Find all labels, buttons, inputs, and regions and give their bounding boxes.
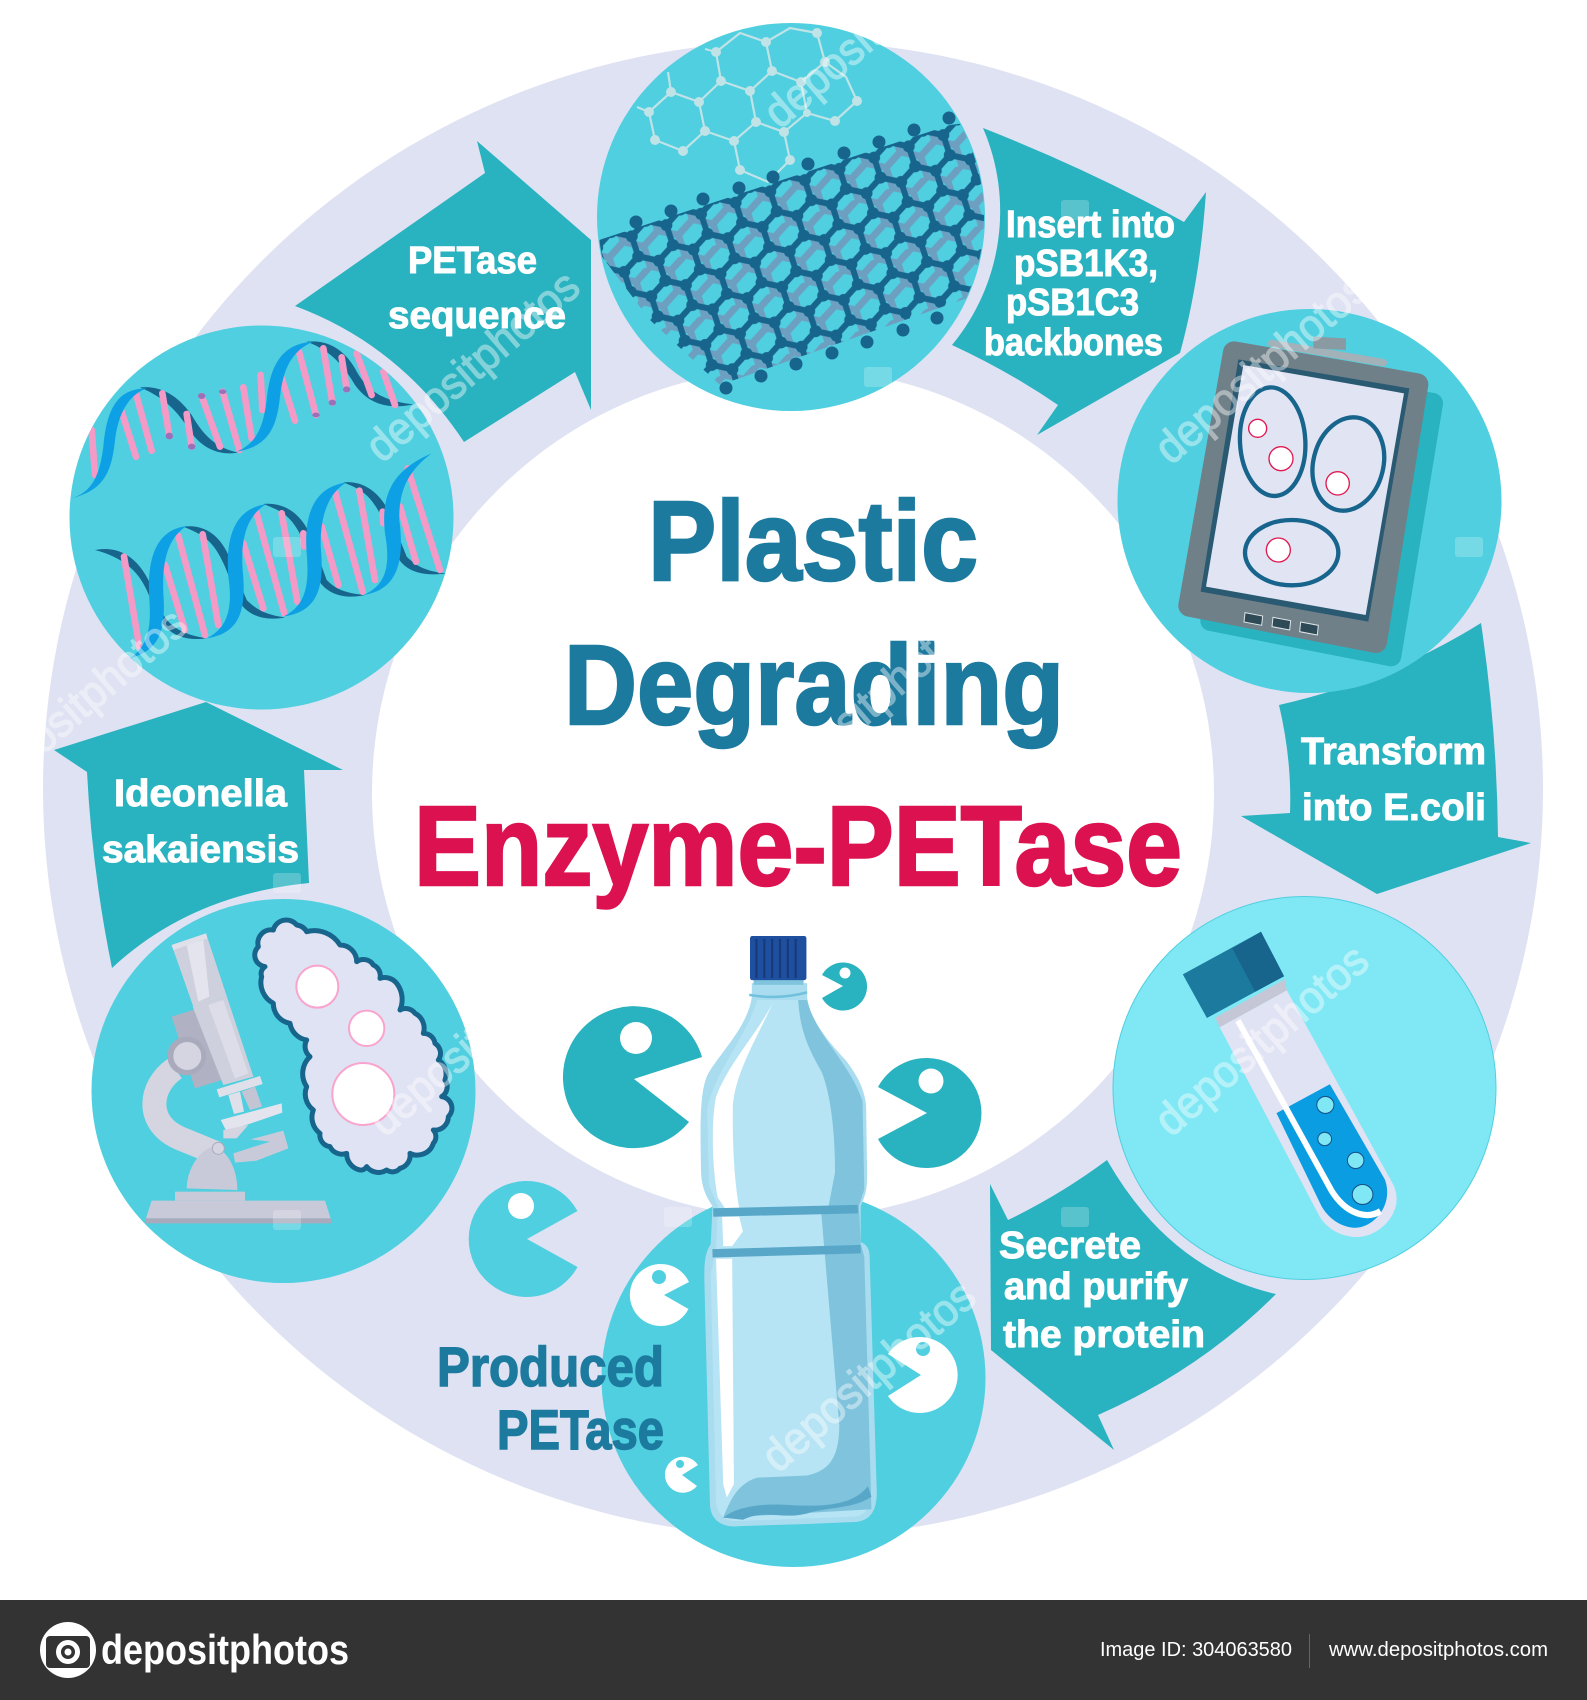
tube glass (1220, 990, 1397, 1237)
website: www.depositphotos.com (1328, 1639, 1548, 1661)
icon: camera logo (40, 1622, 96, 1678)
tablet buttons (1244, 613, 1318, 635)
arrow: insert into backbones: Insert into (1006, 204, 1175, 246)
title (414, 478, 1182, 909)
tube cap (1183, 932, 1284, 1018)
panel: DNA helices (70, 326, 454, 710)
white pac-man enzymes on circle (630, 1264, 958, 1493)
label: produced PETase: PETase (497, 1398, 664, 1461)
tube highlight (1238, 1021, 1380, 1215)
title: Degrading (564, 622, 1064, 748)
bottle cap (750, 936, 806, 980)
label: produced PETase: Produced (437, 1335, 664, 1398)
watermarks (0, 0, 1378, 1482)
watermarks: depositphotos (1144, 262, 1378, 474)
microscope knob (167, 1037, 206, 1075)
arrow: transform into E.coli: Transform (1301, 731, 1486, 773)
clip (1272, 343, 1383, 363)
footer logo text: depositphotos (101, 1626, 349, 1673)
title: Enzyme-PETase (414, 783, 1182, 909)
pac-man enzymes (469, 962, 981, 1297)
arrow: secrete and purify the protein: the protein (1003, 1314, 1205, 1356)
panel: microscope and bacterium (92, 899, 476, 1283)
image id: Image ID: 304063580 (1100, 1639, 1292, 1661)
nanotube lattice (600, 112, 984, 394)
tablet shadow (1211, 370, 1433, 656)
footer bar (0, 1600, 1587, 1700)
panel: tablet with colonies (1118, 309, 1502, 693)
arrow: PETase sequence (295, 141, 591, 442)
purple rung ends (166, 386, 350, 450)
watermarks: depositphotos (751, 1270, 985, 1482)
arrow: insert into backbones (952, 128, 1206, 435)
pink base pairs (92, 348, 440, 647)
bubbles (1317, 1096, 1373, 1204)
panel: carbon nanotube and graphene (590, 23, 1000, 411)
microscope stage (221, 1103, 282, 1132)
arrow: secrete and purify the protein: and purify (1004, 1266, 1188, 1308)
arrow: PETase sequence: sequence (388, 295, 566, 337)
arrow: insert into backbones: pSB1C3 (1006, 282, 1139, 324)
microscope arm (154, 1068, 217, 1153)
tablet body (1189, 352, 1417, 642)
title: Plastic (648, 478, 978, 604)
watermarks: depositphotos (751, 598, 985, 810)
arrow: insert into backbones: pSB1K3, (1014, 243, 1158, 285)
panel: test tube (1113, 896, 1496, 1280)
arrow: Ideonella sakaiensis (54, 702, 343, 968)
watermarks: depositphotos (355, 260, 589, 472)
watermarks: depositphotos (358, 934, 592, 1146)
label: produced PETase (437, 1335, 664, 1461)
light DNA strands (72, 342, 432, 658)
microscope base (187, 1147, 237, 1190)
microscope back block (172, 1009, 222, 1088)
arrow: transform into E.coli: into E.coli (1302, 787, 1486, 829)
watermarks: depositphotos (1144, 934, 1378, 1146)
panel: bottle base circle (602, 1189, 986, 1567)
plastic bottle (701, 936, 877, 1526)
arrow: Ideonella sakaiensis: sakaiensis (102, 829, 299, 871)
liquid (1276, 1084, 1387, 1228)
dark DNA strands (95, 341, 447, 639)
colony ovals (1237, 386, 1394, 585)
arrow: secrete and purify the protein: Secrete (999, 1225, 1141, 1267)
arrow: Ideonella sakaiensis: Ideonella (114, 773, 288, 815)
graphene sheet (637, 28, 862, 182)
microscope body (193, 996, 253, 1085)
arrow: transform into E.coli (1241, 623, 1531, 894)
bacterium (255, 920, 452, 1172)
camera watermark icons (273, 200, 1483, 1230)
arrow: insert into backbones: backbones (984, 322, 1163, 364)
arrow: secrete and purify the protein (990, 1160, 1276, 1450)
tube neck (1215, 979, 1287, 1027)
arrow: PETase sequence: PETase (408, 240, 537, 282)
